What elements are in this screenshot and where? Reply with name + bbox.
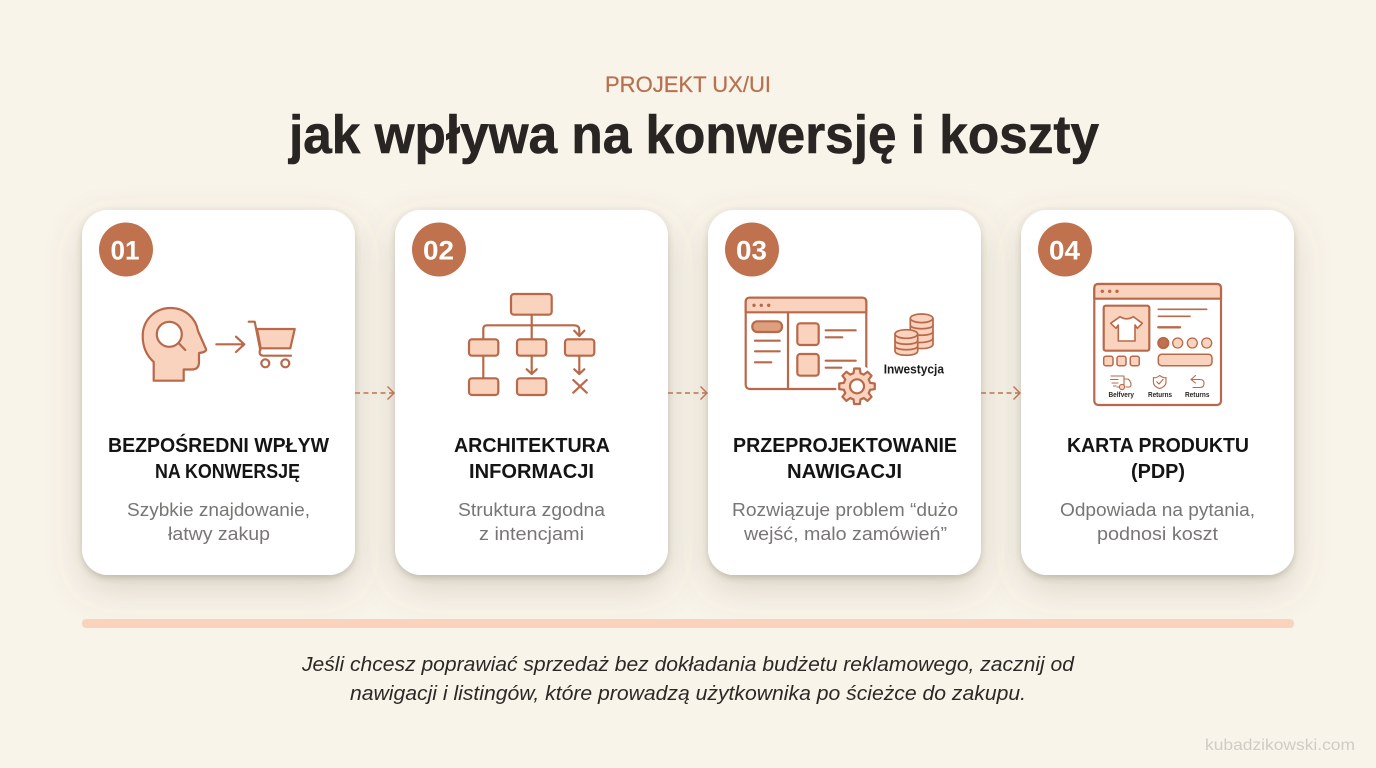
- card 02 description: Struktura zgodna: [458, 499, 606, 520]
- arrow: card 01 to 02: [355, 386, 394, 400]
- card background: [395, 210, 668, 575]
- eyebrow heading: PROJEKT UX/UI: [605, 72, 771, 97]
- panel: card 02: [395, 210, 668, 575]
- closing statement: nawigacji i listingów, które prowadzą użytkownika po ścieżce do zakupu.: [350, 683, 1026, 705]
- card 02 heading: INFORMACJI: [469, 461, 594, 483]
- number badge 02: [412, 222, 466, 276]
- card 01 heading: [108, 433, 329, 483]
- product page labels: Returns: [1185, 390, 1210, 399]
- icon: head with magnifier and cart: [143, 308, 295, 381]
- number badge 04: [1038, 222, 1092, 276]
- panel: card 01: [82, 210, 355, 575]
- card 04 heading: [1067, 435, 1249, 483]
- card 03 heading: PRZEPROJEKTOWANIE: [733, 435, 957, 457]
- footer url: kubadzikowski.com: [1205, 737, 1355, 754]
- card 03 heading: NAWIGACJI: [787, 461, 902, 483]
- product page labels: Belfvery: [1108, 390, 1135, 399]
- card background: [1021, 210, 1294, 575]
- divider bar: [82, 619, 1294, 628]
- card 01 heading: NA KONWERSJĘ: [155, 461, 300, 483]
- card background: [708, 210, 981, 575]
- card 02 description: z intencjami: [479, 523, 584, 544]
- card 03 description: [732, 499, 958, 544]
- number badge 03: 03: [736, 235, 767, 265]
- closing statement: [301, 654, 1075, 705]
- card 03 description: Rozwiązuje problem “dużo: [732, 499, 958, 520]
- card background: [82, 210, 355, 575]
- card 01 heading: BEZPOŚREDNI WPŁYW: [108, 433, 329, 457]
- card 02 description: [458, 499, 606, 544]
- arrow: card 03 to 04: [981, 386, 1020, 400]
- icon: navigation window with gear: [746, 298, 878, 407]
- number badge 04: 04: [1049, 235, 1080, 265]
- panel: card 03: [708, 210, 981, 575]
- card 01 description: łatwy zakup: [168, 523, 270, 544]
- card 01 description: Szybkie znajdowanie,: [127, 499, 310, 520]
- icon: coin stacks: [895, 314, 933, 355]
- card 04 description: podnosi koszt: [1097, 523, 1218, 544]
- arrow: card 02 to 03: [668, 386, 707, 400]
- product page labels: Returns: [1148, 390, 1172, 399]
- card 02 heading: [454, 435, 610, 483]
- icon: site structure tree: [469, 294, 594, 395]
- card 03 heading: [733, 435, 957, 483]
- number badge 02: 02: [423, 235, 454, 265]
- card 02 heading: ARCHITEKTURA: [454, 435, 610, 457]
- product page labels: [1108, 390, 1210, 399]
- icon: product page window: [1094, 284, 1221, 405]
- number badge 01: 01: [110, 235, 140, 265]
- card 04 heading: (PDP): [1131, 461, 1185, 483]
- panel: card 04: [1021, 210, 1294, 575]
- label: investment: Inwestycja: [884, 362, 945, 376]
- card 04 heading: KARTA PRODUKTU: [1067, 435, 1249, 457]
- card 04 description: Odpowiada na pytania,: [1060, 499, 1255, 520]
- number badge 03: [725, 222, 779, 276]
- card 03 description: wejść, malo zamówień”: [743, 523, 947, 544]
- number badge 01: [99, 222, 153, 276]
- title: jak wpływa na konwersję i koszty: [288, 105, 1099, 165]
- card 04 description: [1060, 499, 1255, 544]
- closing statement: Jeśli chcesz poprawiać sprzedaż bez dokładania budżetu reklamowego, zacznij od: [301, 654, 1075, 676]
- card 01 description: [127, 499, 310, 544]
